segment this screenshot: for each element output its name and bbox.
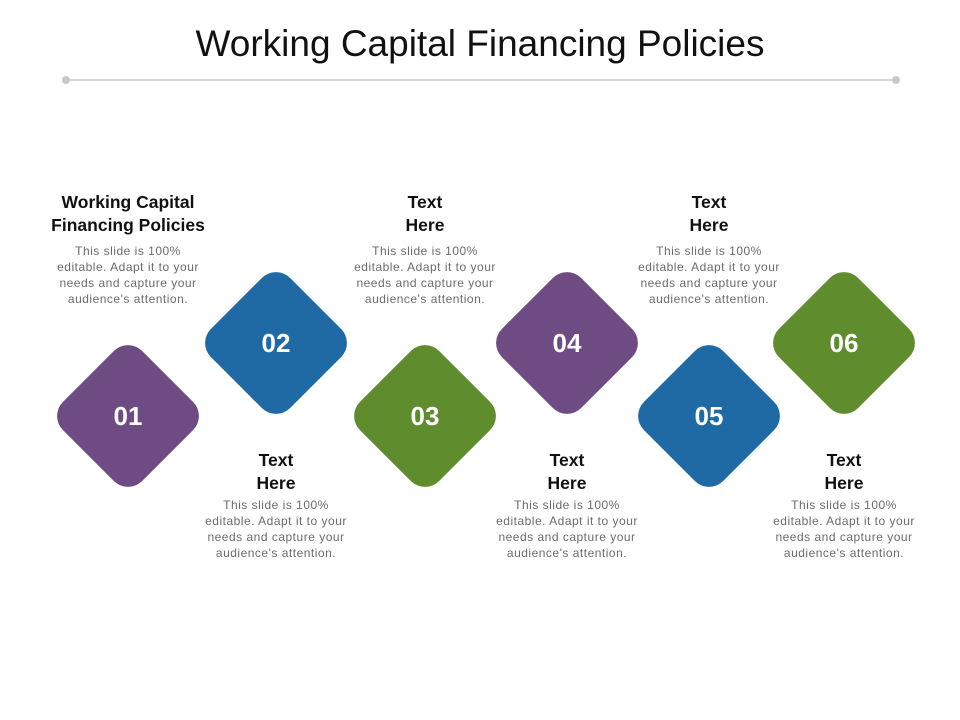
- text block 6: audience's attention.: [784, 546, 904, 560]
- text block 6: needs and capture your: [775, 530, 913, 544]
- text block 1: audience's attention.: [68, 292, 188, 306]
- text block 5: Text: [692, 192, 726, 212]
- text block 2: editable. Adapt it to your: [205, 514, 347, 528]
- number 04: 04: [553, 328, 581, 358]
- diamond 04: [488, 264, 646, 422]
- text block 3: audience's attention.: [365, 292, 485, 306]
- number 01: 01: [114, 401, 142, 431]
- title underline: [62, 76, 900, 84]
- text block 4: [496, 450, 638, 560]
- text block 1: Working Capital Financing Policies: [51, 192, 205, 235]
- text block 3: Text: [408, 192, 442, 212]
- text block 6: Here: [825, 473, 863, 493]
- text block 5: needs and capture your: [640, 276, 778, 290]
- text block 6: Text: [827, 450, 861, 470]
- diamond 06: [765, 264, 923, 422]
- text block 2: Text: [259, 450, 293, 470]
- text block 1: editable. Adapt it to your: [57, 260, 199, 274]
- text block 3: needs and capture your: [356, 276, 494, 290]
- text block 3: Here: [406, 215, 444, 235]
- text block 5: Here: [690, 215, 728, 235]
- text block 4: audience's attention.: [507, 546, 627, 560]
- text block 6: editable. Adapt it to your: [773, 514, 915, 528]
- text block 2: This slide is 100%: [223, 498, 329, 512]
- text block 1: This slide is 100%: [75, 244, 181, 258]
- number 02: 02: [262, 328, 290, 358]
- text block 4: Here: [548, 473, 586, 493]
- text block 1: [51, 192, 205, 306]
- text block 6: [773, 450, 915, 560]
- diamond 05: [630, 337, 788, 495]
- text block 5: This slide is 100%: [656, 244, 762, 258]
- text block 3: [354, 192, 496, 306]
- text block 4: This slide is 100%: [514, 498, 620, 512]
- text block 2: [205, 450, 347, 560]
- number 05: 05: [695, 401, 723, 431]
- text block 3: editable. Adapt it to your: [354, 260, 496, 274]
- diamond 01: [49, 337, 207, 495]
- diamond 02: [197, 264, 355, 422]
- diamond 03: [346, 337, 504, 495]
- text block 5: [638, 192, 780, 306]
- text block 3: This slide is 100%: [372, 244, 478, 258]
- text block 4: needs and capture your: [498, 530, 636, 544]
- text block 2: needs and capture your: [207, 530, 345, 544]
- text block 5: editable. Adapt it to your: [638, 260, 780, 274]
- text block 2: Here: [257, 473, 295, 493]
- text block 4: Text: [550, 450, 584, 470]
- text block 5: audience's attention.: [649, 292, 769, 306]
- text block 4: editable. Adapt it to your: [496, 514, 638, 528]
- number 03: 03: [411, 401, 439, 431]
- number 06: 06: [830, 328, 858, 358]
- title: Working Capital Financing Policies: [196, 23, 764, 64]
- text block 6: This slide is 100%: [791, 498, 897, 512]
- text block 1: needs and capture your: [59, 276, 197, 290]
- text block 2: audience's attention.: [216, 546, 336, 560]
